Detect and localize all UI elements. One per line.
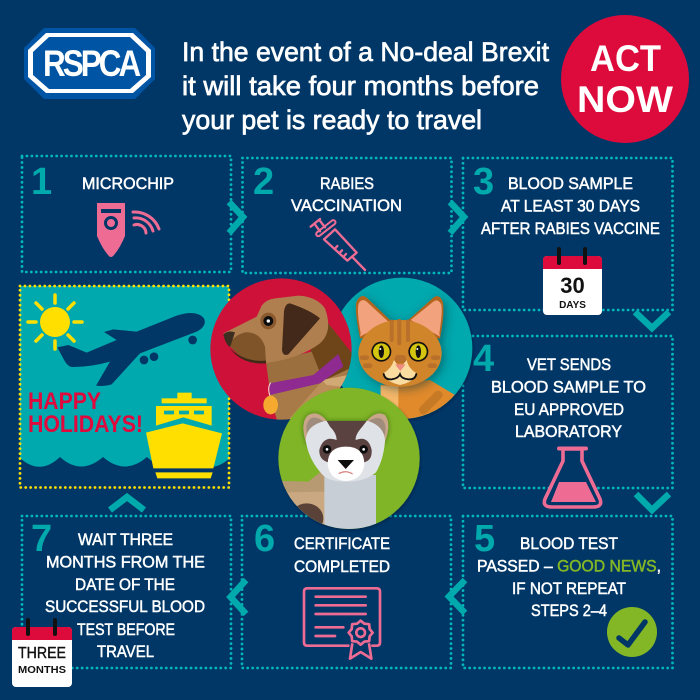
heading: happy holidays [28,388,143,438]
waves [20,457,230,487]
icon: microchip [97,203,159,257]
icon: calendar 30 days [543,249,602,315]
panel: step 7 wait three months: TRAVEL [97,643,154,661]
panel: step 6 certificate [242,516,451,668]
arrow: step 3 to 4 [635,312,669,328]
logo: RSPCA: RSPCA [43,44,140,85]
panel: step 7 wait three months: DATE OF THE [75,576,175,594]
icon: certificate [304,588,380,659]
arrow: step 4 to 5 [636,494,669,510]
icon: flask [544,448,601,507]
panel: step 4 vet sends sample: BLOOD SAMPLE TO [491,378,646,396]
title: it will take four months before [182,71,539,101]
panel: step 4 vet sends sample [463,336,672,507]
arrow: step 1 to 2 [229,202,243,233]
icon: plane [57,313,205,386]
badge: act now: ACT [590,38,661,79]
panel: step 7 wait three months: WAIT THREE [78,531,173,549]
panel: step 4 vet sends sample: VET SENDS [527,356,611,374]
panel: step 5 blood test passed: 5 [474,518,495,560]
icon: green check [607,607,657,657]
badge: act now: NOW [577,79,673,120]
panel: step 7 wait three months: MONTHS FROM THE [46,554,205,572]
panel: step 1 microchip [22,156,231,272]
icon: ship [146,393,222,478]
arrow: step 6 to 7 [230,580,246,614]
illustration: pets [210,278,472,533]
heading: happy holidays: HAPPY [28,388,101,415]
panel: step 5 blood test passed: PASSED – GOOD NEWS, [477,558,661,576]
title: your pet is ready to travel [182,105,482,135]
icon: calendar three months: THREE [18,645,66,662]
panel: happy holidays [20,286,230,488]
panel: step 2 rabies vaccination: VACCINATION [291,197,402,215]
panel: step 3 blood sample [463,158,672,315]
panel: step 7 wait three months: 7 [31,518,52,560]
logo: RSPCA [24,28,155,99]
title: In the event of a No-deal Brexit [182,37,549,67]
panel: step 5 blood test passed: STEPS 2–4 [531,602,607,620]
arrow: step 2 to 3 [450,202,464,233]
illustration: ferret [278,388,420,533]
panel: step 1 microchip: MICROCHIP [82,175,174,193]
illustration: cat [331,278,472,423]
badge: act now [561,15,689,143]
icon: sun [28,295,82,349]
arrow: step 5 to 6 [449,580,465,613]
arrow: step 7 to holidays [110,497,144,510]
panel: step 1 microchip: 1 [31,161,52,203]
icon: syringe [311,219,365,270]
icon: calendar 30 days: 30 [560,273,585,298]
icon: calendar 30 days: DAYS [559,300,586,311]
heading: happy holidays: HOLIDAYS! [28,411,143,438]
panel: step 6 certificate: CERTIFICATE [294,535,390,553]
title [182,37,549,135]
panel: step 5 blood test passed: BLOOD TEST [520,535,618,553]
panel: step 2 rabies vaccination [242,158,452,273]
icon: calendar three months [12,620,72,687]
panel: step 4 vet sends sample: EU APPROVED [514,401,624,419]
panel: step 7 wait three months: SUCCESSFUL BLOOD [45,598,205,616]
panel: step 5 blood test passed [463,516,672,668]
panel: step 5 blood test passed: IF NOT REPEAT [512,580,626,598]
panel: step 3 blood sample: BLOOD SAMPLE [508,175,633,193]
illustration: dog [210,278,353,425]
panel: step 4 vet sends sample: LABORATORY [515,423,622,441]
panel: step 3 blood sample: AT LEAST 30 DAYS [501,198,640,216]
panel: step 2 rabies vaccination: 2 [253,161,274,203]
panel: step 6 certificate: COMPLETED [294,558,390,576]
panel: step 2 rabies vaccination: RABIES [320,175,374,193]
panel: step 6 certificate: 6 [254,518,275,560]
panel: step 7 wait three months [12,516,231,687]
panel: step 7 wait three months: TEST BEFORE [77,621,175,639]
icon: calendar three months: MONTHS [18,664,66,676]
panel: step 3 blood sample: AFTER RABIES VACCINE [481,220,660,238]
panel: step 3 blood sample: 3 [473,161,494,203]
panel: step 4 vet sends sample: 4 [473,338,494,380]
